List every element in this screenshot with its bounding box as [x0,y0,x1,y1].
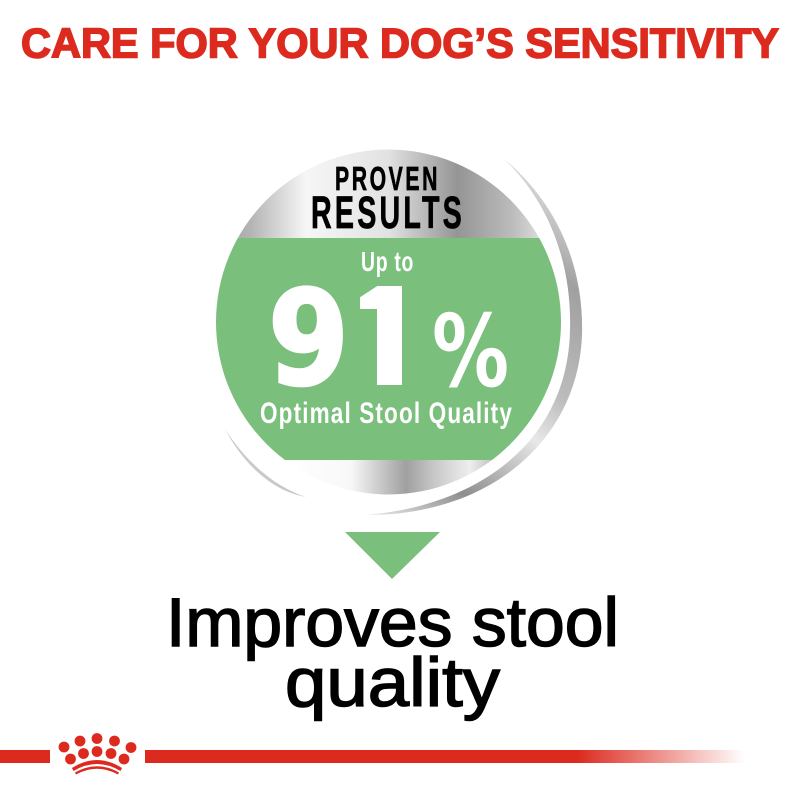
title: CARE FOR YOUR DOG’S SENSITIVITY [21,20,779,66]
badge outer ring [365,158,582,515]
badge: proven results [216,149,582,515]
icon: royal crown [59,733,136,774]
benefit heading [166,584,619,721]
badge text: up to: Up to [361,246,414,277]
badge heading: results: RESULTS [311,187,465,238]
arrow [345,532,440,579]
footer rule right [145,750,745,763]
badge metallic top segment [238,150,539,238]
badge green band [216,238,561,460]
badge metallic bottom segment [352,460,492,494]
badge figure: 1: 1 [347,261,424,415]
badge bottom-left ring [225,429,306,497]
benefit line 1: Improves stool [166,584,619,661]
badge text: optimal stool quality: Optimal Stool Quality [260,397,513,430]
badge figure: percent: % [432,293,509,410]
footer rule left [0,750,50,763]
benefit line 2: quality [285,644,501,721]
badge figure: 9: 9 [268,262,349,415]
badge heading: proven: PROVEN [335,160,440,197]
